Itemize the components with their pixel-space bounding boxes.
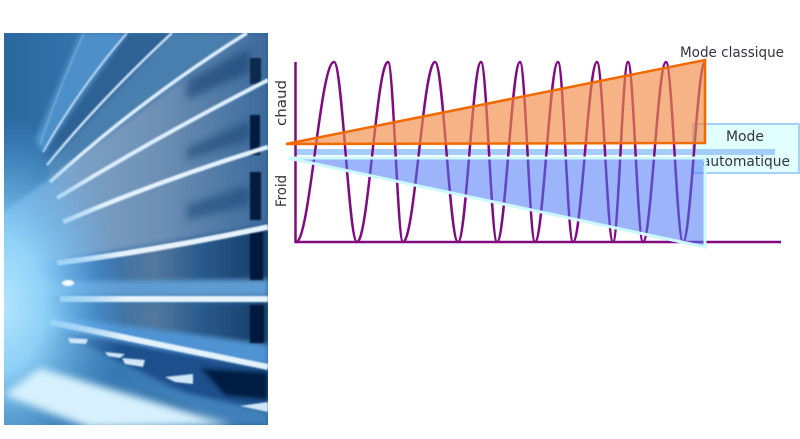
blue triangle: Mode automatique	[288, 158, 705, 247]
sine wave curve	[296, 62, 705, 242]
label: automatique: automatique	[702, 154, 790, 170]
photo: air conditioner louvres	[0, 33, 268, 430]
separator band	[296, 149, 775, 155]
label: Mode classique: Mode classique	[680, 45, 784, 61]
axis label: Froid: Froid	[274, 175, 290, 207]
label: Mode: Mode	[726, 129, 764, 145]
chart axes	[296, 62, 781, 242]
left haze glow	[4, 129, 120, 425]
dark uprights	[250, 58, 264, 343]
axis label: chaud: chaud	[274, 80, 290, 126]
bright spot	[62, 280, 74, 286]
small reflections	[68, 338, 268, 412]
bright slats	[40, 33, 268, 367]
soft shadows under upper slats	[187, 48, 250, 220]
callout box: Mode automatique	[693, 124, 799, 173]
bottom pale slat	[4, 368, 232, 428]
orange triangle: Mode classique	[286, 60, 705, 144]
